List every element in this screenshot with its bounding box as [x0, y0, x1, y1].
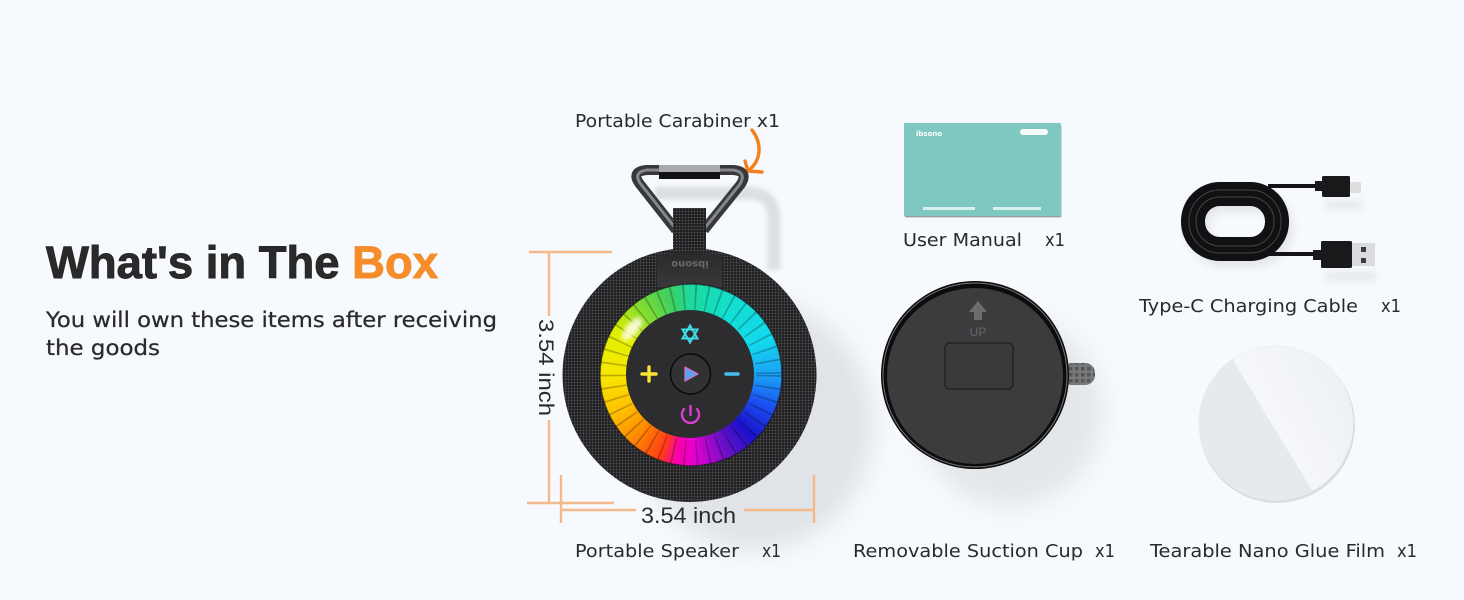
label: charging cable: x1	[1381, 296, 1401, 317]
icon: suction cup	[881, 281, 1095, 469]
icon: charging cable	[1189, 176, 1375, 268]
label: nano glue film: Tearable Nano Glue Film	[1149, 541, 1385, 562]
icon: minus	[726, 372, 738, 376]
width dimension	[561, 475, 814, 523]
label: suction cup: x1	[1095, 541, 1115, 562]
width dimension label: 3.54 inch	[641, 503, 736, 528]
icon: user manual: ibsono	[916, 130, 942, 138]
icon: power	[682, 406, 699, 423]
icon: carabiner	[636, 165, 744, 230]
suction cup button	[945, 343, 1013, 389]
speaker band: ibsono	[671, 258, 709, 269]
play button	[670, 354, 710, 394]
icon: nano glue film	[1198, 346, 1355, 503]
label: portable speaker: Portable Speaker	[575, 541, 740, 562]
height dimension label: 3.54 inch	[534, 319, 557, 416]
label: user manual: User Manual	[903, 230, 1022, 251]
icon: user manual	[904, 123, 1061, 217]
speaker control disc	[626, 310, 754, 438]
icon: plus	[642, 367, 656, 381]
label: nano glue film: x1	[1397, 541, 1417, 562]
title: What's in The Box	[46, 237, 438, 288]
arrow: carabiner pointer	[745, 130, 762, 172]
label: charging cable: Type-C Charging Cable	[1138, 296, 1358, 317]
subtitle text: the goods	[46, 336, 160, 360]
icon: light mode	[682, 326, 698, 342]
speaker mesh body	[562, 248, 816, 502]
speaker strap	[673, 208, 706, 258]
suction cup tab	[1062, 363, 1095, 385]
label: suction cup: Removable Suction Cup	[853, 541, 1083, 562]
speaker band	[657, 252, 722, 287]
label: user manual: x1	[1045, 230, 1065, 251]
label: portable speaker: x1	[762, 541, 781, 562]
up label: UP	[970, 325, 986, 339]
cable shadow	[1197, 200, 1376, 276]
speaker drop shadow	[637, 193, 873, 550]
label: user manual	[903, 230, 1065, 251]
usb connector	[1268, 241, 1375, 268]
subtitle text: You will own these items after receiving	[45, 308, 497, 332]
label: portable carabiner: Portable Carabiner x1	[575, 111, 780, 132]
suction cup shadow	[918, 317, 1102, 507]
height dimension	[527, 252, 614, 503]
icon: speaker	[562, 208, 816, 502]
arrow: up	[969, 301, 987, 320]
subtitle text	[45, 308, 497, 360]
speaker light ring	[600, 284, 782, 466]
type-c connector	[1268, 176, 1361, 197]
